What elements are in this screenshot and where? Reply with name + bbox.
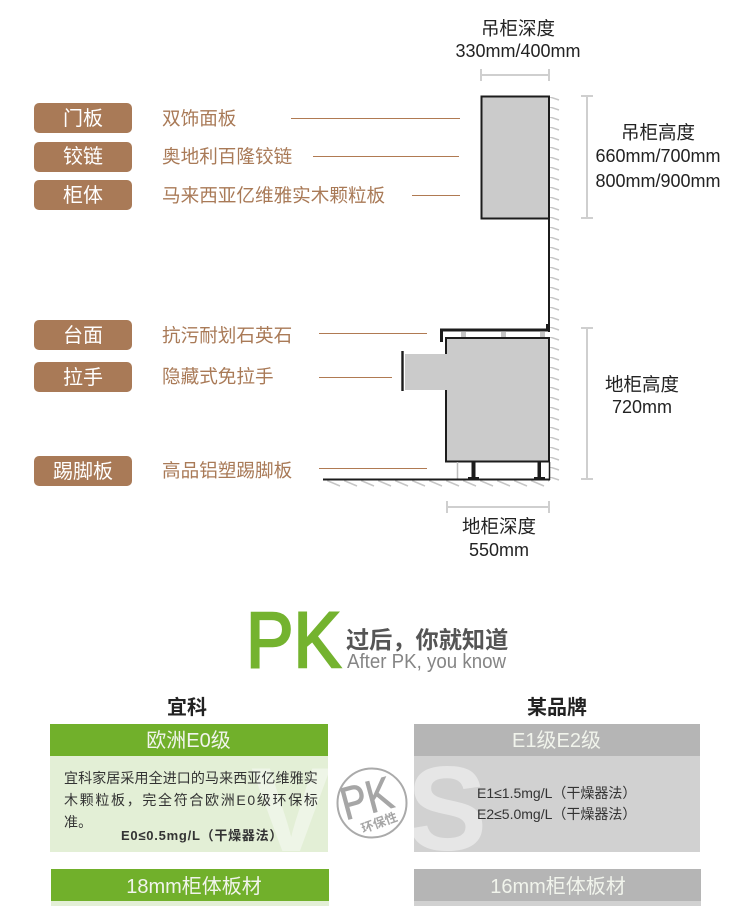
spec row: handle: 隐藏式免拉手 — [162, 366, 274, 387]
panel: Yike column: 18mm柜体板材 — [126, 875, 262, 898]
dimension: wall cabinet depth: 吊柜深度 — [481, 18, 555, 39]
spec row: hinge — [34, 142, 459, 172]
dimension: base cabinet depth: 地柜深度 — [462, 516, 536, 537]
dimension: wall cabinet depth — [455, 18, 581, 81]
spec row: handle: 拉手 — [63, 366, 103, 389]
dimension: wall cabinet height — [581, 96, 721, 218]
watermark S: S — [407, 742, 487, 876]
legs — [468, 324, 549, 479]
watermark V: V — [251, 743, 331, 877]
kickboard — [456, 462, 458, 479]
countertop supports — [461, 332, 545, 337]
PK heading — [246, 595, 508, 684]
panel header — [50, 724, 328, 756]
spec row: cabinet body: 柜体 — [63, 184, 103, 207]
spec row: countertop: 抗污耐划石英石 — [162, 325, 292, 346]
formula: E0≤0.5mg/L（干燥器法） — [121, 828, 283, 843]
wall and floor hatching — [327, 97, 560, 487]
dimension: base cabinet depth: 550mm — [469, 540, 529, 560]
PK heading: After PK, you know — [347, 651, 507, 673]
base cabinet — [446, 338, 549, 462]
spec row: door panel — [34, 103, 460, 133]
column title: 宜科 — [167, 695, 207, 719]
dimension: base cabinet height — [581, 328, 679, 479]
spec row: countertop — [34, 320, 427, 350]
spec row: kickboard: 高品铝塑踢脚板 — [162, 460, 292, 481]
drawer front — [401, 351, 404, 391]
icon: PK eco badge: PK — [335, 766, 399, 830]
body text: 准。 — [64, 814, 92, 830]
body text: E1≤1.5mg/L（干燥器法） — [477, 785, 636, 801]
dimension: wall cabinet height: 吊柜高度 — [621, 122, 695, 143]
body text: 宜科家居采用全进口的马来西亚亿维雅实 — [64, 770, 318, 786]
body text: 木颗粒板，完全符合欧洲E0级环保标 — [64, 792, 318, 808]
spec row: door panel: 门板 — [63, 107, 103, 130]
spec row: kickboard — [34, 456, 427, 486]
PK heading: PK — [246, 595, 341, 684]
panel header — [414, 724, 700, 756]
spec row: kickboard: 踢脚板 — [53, 460, 113, 483]
spec row: handle — [34, 362, 392, 392]
base cabinet outline — [446, 338, 549, 462]
spec row: countertop: 台面 — [63, 324, 103, 347]
column title: 某品牌 — [527, 696, 587, 719]
second row header — [414, 869, 701, 901]
panel: Yike column — [50, 695, 331, 906]
cabinet cross-section diagram — [323, 96, 560, 487]
panel: Yike column: 欧洲E0级 — [146, 729, 231, 752]
spec row: cabinet body — [34, 180, 460, 210]
spec row: door panel: 双饰面板 — [162, 108, 236, 129]
second row header — [51, 869, 329, 901]
dimension: base cabinet height: 地柜高度 — [605, 374, 679, 395]
dimension: base cabinet height: 720mm — [612, 397, 672, 417]
spec row: hinge: 铰链 — [63, 145, 103, 168]
spec row: cabinet body: 马来西亚亿维雅实木颗粒板 — [162, 185, 385, 206]
dimension: wall cabinet depth: 330mm/400mm — [455, 41, 581, 61]
floor — [323, 478, 550, 480]
drawer — [405, 354, 447, 390]
PK heading: 过后，你就知道 — [346, 627, 508, 653]
spec row: hinge: 奥地利百隆铰链 — [162, 146, 293, 167]
wall cabinet — [482, 96, 549, 218]
dimension: wall cabinet height: 660mm/700mm — [595, 146, 721, 166]
wall line — [548, 218, 550, 332]
panel: other brand column: E1级E2级 — [512, 729, 601, 752]
countertop — [442, 330, 549, 342]
panel body — [414, 756, 700, 852]
panel: other brand column: 16mm柜体板材 — [490, 875, 626, 898]
dimension: wall cabinet height: 800mm/900mm — [595, 171, 721, 191]
body text: E2≤5.0mg/L（干燥器法） — [477, 806, 636, 822]
body text — [477, 785, 636, 822]
icon: PK eco badge: 环保性 — [359, 809, 400, 836]
panel body — [50, 756, 328, 852]
body text — [64, 770, 318, 830]
panel: other brand column — [407, 696, 701, 906]
dimension: base cabinet depth — [447, 501, 549, 560]
